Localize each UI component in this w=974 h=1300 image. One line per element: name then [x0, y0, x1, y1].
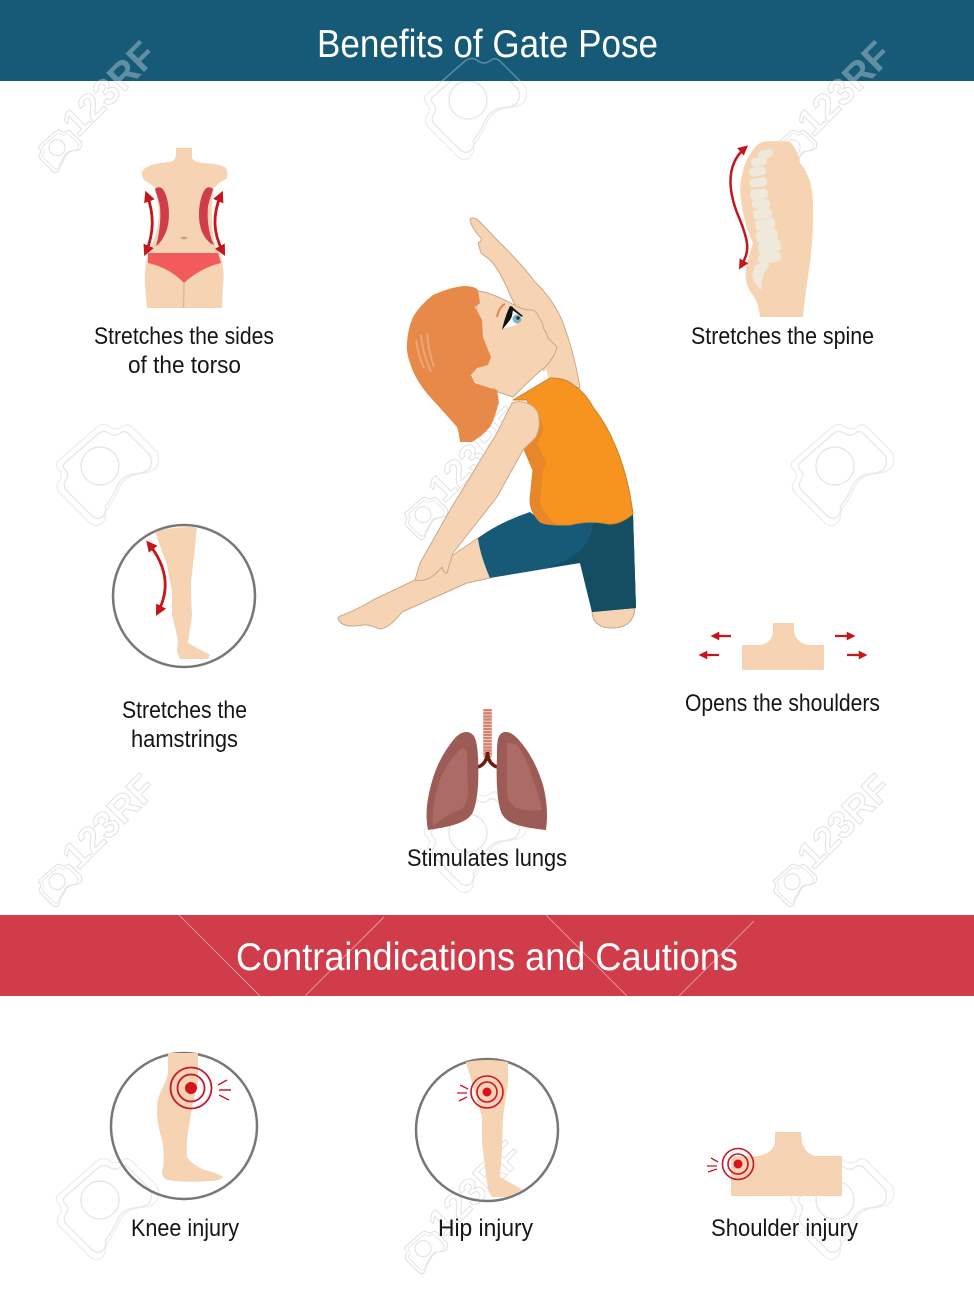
lashes	[502, 306, 523, 330]
hair	[407, 286, 499, 442]
watermarks: 123RF	[55, 767, 165, 877]
label: hamstrings: Stretches the	[122, 697, 247, 724]
head	[472, 291, 557, 397]
extended leg	[338, 538, 490, 629]
icon: shoulder injury	[707, 1132, 842, 1196]
hair highlight	[416, 333, 434, 372]
watermark overlay on banner: 123RF	[55, 34, 165, 144]
front arm	[415, 402, 539, 581]
label: lungs: Stimulates lungs	[407, 845, 567, 872]
label: shoulder injury: Shoulder injury	[711, 1215, 858, 1242]
shorts	[478, 512, 636, 612]
label: sides of the torso	[94, 323, 274, 379]
title: contraindications: Contraindications and Cautions	[236, 936, 738, 979]
raised arm	[470, 218, 580, 388]
watermarks: 123RF	[55, 34, 165, 144]
figure: gate pose child	[338, 218, 636, 629]
label: shoulders: Opens the shoulders	[685, 690, 880, 717]
icon: hamstrings	[113, 525, 255, 667]
ear	[471, 368, 502, 388]
icon: knee injury	[111, 1053, 257, 1199]
icon: lungs	[427, 709, 547, 830]
icon: shoulders	[702, 623, 864, 670]
iris	[512, 314, 522, 324]
title: benefits: Benefits of Gate Pose	[317, 23, 658, 66]
label: spine: Stretches the spine	[691, 323, 874, 350]
eye white	[503, 307, 523, 329]
label: knee injury: Knee injury	[131, 1215, 239, 1242]
watermarks: 123RF	[790, 34, 900, 144]
neck gap	[538, 369, 549, 380]
shirt shade	[523, 400, 555, 525]
icon: torso with side stretch	[142, 148, 228, 308]
banner: benefits	[0, 0, 974, 81]
shirt	[513, 378, 633, 525]
label: sides of the torso: Stretches the sides	[94, 323, 274, 350]
knee	[592, 607, 635, 628]
watermarks: 123RF	[421, 400, 531, 510]
icon: hip injury	[416, 1059, 558, 1201]
label: sides of the torso: of the torso	[128, 352, 241, 379]
label: hamstrings	[122, 697, 247, 753]
watermarks: 123RF	[790, 767, 900, 877]
banner: contraindications	[0, 915, 974, 996]
watermark overlay on banner	[98, 40, 886, 81]
label: hamstrings: hamstrings	[131, 726, 238, 753]
watermark overlay on banner: 123RF	[790, 34, 900, 144]
shorts shade	[548, 514, 636, 612]
eyebrow	[497, 304, 505, 317]
icon: spine	[730, 141, 813, 317]
label: hip injury: Hip injury	[438, 1215, 533, 1242]
watermarks: 123RF	[421, 1134, 531, 1244]
